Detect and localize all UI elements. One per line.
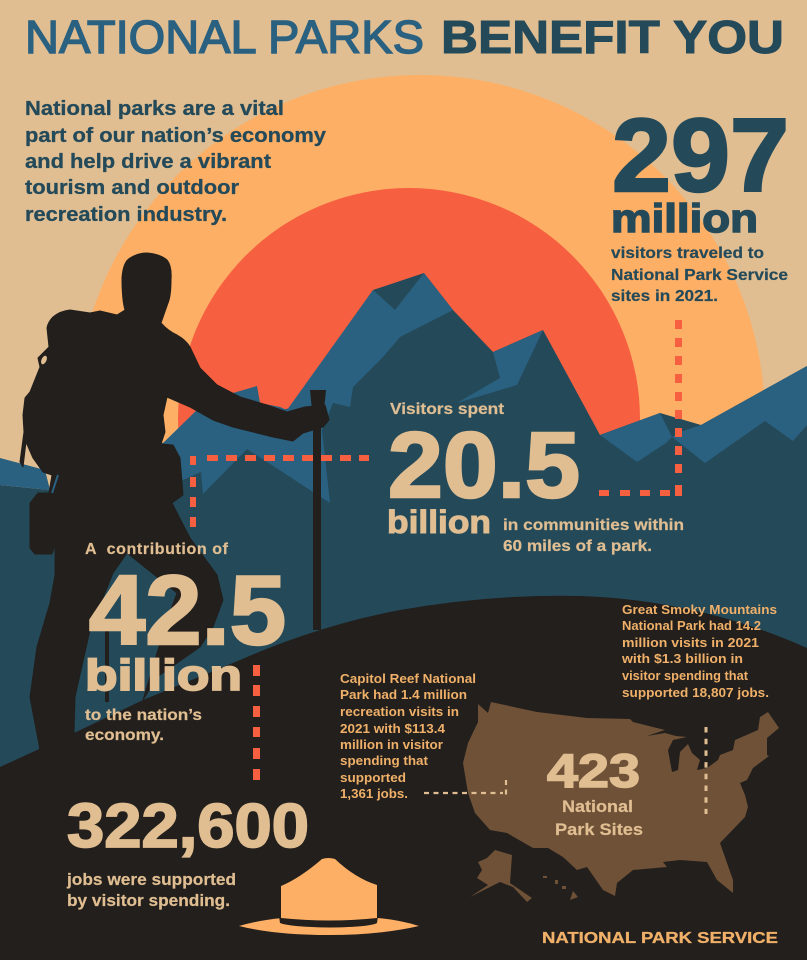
title: BENEFIT YOU	[441, 11, 784, 63]
title: NATIONAL PARKS	[25, 11, 424, 63]
bottle strap slit	[52, 475, 58, 493]
stat: 42.5 billion contribution	[85, 541, 286, 744]
callout: Capitol Reef: supported	[340, 770, 406, 785]
stat: 297 million visitors: 297	[612, 98, 789, 214]
callout: Capitol Reef: 2021 with $113.4	[340, 721, 446, 736]
callout: Great Smoky Mountains: million visits in 2021	[622, 635, 759, 650]
stat: 322,600 jobs	[66, 792, 309, 910]
intro text: and help drive a vibrant	[25, 151, 271, 173]
stat: 20.5 billion spent: Visitors spent	[390, 401, 504, 418]
callout: Great Smoky Mountains: visitor spending that	[622, 668, 749, 683]
callout: Great Smoky Mountains: with $1.3 billion in	[621, 651, 743, 666]
map of the United States	[463, 702, 779, 902]
dotted connector: 20.5 to 42.5	[190, 455, 369, 527]
footer credit: NATIONAL PARK SERVICE	[542, 930, 778, 947]
stat: 42.5 billion contribution: 42.5	[89, 555, 286, 665]
sun: inner red disc	[178, 188, 640, 650]
intro text: recreation industry.	[25, 204, 227, 226]
stat: 42.5 billion contribution: billion	[85, 651, 242, 700]
dotted connector: 297 million to 20.5	[599, 320, 682, 496]
stat: 297 million visitors: National Park Service	[611, 267, 788, 284]
intro text	[25, 98, 327, 226]
foreground hill	[0, 596, 807, 960]
intro text: part of our nation’s economy	[25, 125, 327, 147]
stat: 42.5 billion contribution: A contribution of	[85, 541, 229, 558]
map label: 423 National Park Sites: Park Sites	[555, 820, 643, 839]
stat: 20.5 billion spent	[387, 401, 684, 555]
stat: 20.5 billion spent: 60 miles of a park.	[503, 538, 652, 555]
intro text: tourism and outdoor	[25, 177, 239, 199]
stat: 20.5 billion spent: billion	[387, 504, 491, 540]
dotted connector: 42.5 to 322,600	[253, 665, 260, 780]
callout: Great Smoky Mountains: supported 18,807 jobs.	[622, 685, 769, 700]
callout: Capitol Reef: 1,361 jobs.	[340, 786, 408, 801]
title	[25, 11, 784, 63]
stat: 42.5 billion contribution: economy.	[85, 727, 164, 744]
trekking pole	[310, 390, 326, 630]
stat: 297 million visitors	[611, 98, 789, 305]
mountains: blue highlights	[0, 273, 807, 503]
stat: 297 million visitors: sites in 2021.	[611, 288, 718, 305]
stat: 297 million visitors: million	[611, 197, 758, 241]
callout: Capitol Reef: Capitol Reef National	[340, 671, 476, 686]
callout: Great Smoky Mountains: National Park had 14.2	[622, 618, 761, 633]
callout: Capitol Reef: million in visitor	[340, 737, 443, 752]
stat: 297 million visitors: visitors traveled to	[611, 245, 764, 262]
mountains: dark range	[0, 273, 807, 780]
stat: 322,600 jobs: 322,600	[67, 792, 309, 861]
map label: 423 National Park Sites	[547, 744, 643, 839]
intro text: National parks are a vital	[25, 98, 284, 120]
callout: Great Smoky Mountains	[621, 602, 777, 700]
map label: 423 National Park Sites: National	[562, 797, 633, 816]
callout: Capitol Reef: spending that	[340, 753, 429, 768]
stat: 20.5 billion spent: in communities within	[503, 517, 684, 534]
park ranger hat	[239, 858, 419, 935]
callout: Great Smoky Mountains: Great Smoky Mountains	[622, 602, 777, 617]
Alaska	[470, 850, 532, 902]
stat: 20.5 billion spent: 20.5	[388, 413, 580, 517]
map connector: Capitol Reef	[424, 780, 506, 795]
stat: 42.5 billion contribution: to the nation’s	[85, 707, 202, 724]
map connector: Great Smoky Mountains	[704, 727, 708, 814]
stat: 322,600 jobs: by visitor spending.	[67, 892, 230, 910]
Hawaii	[543, 876, 578, 900]
callout: Capitol Reef	[340, 671, 476, 801]
backpack strap gap	[40, 355, 48, 365]
map label: 423 National Park Sites: 423	[547, 744, 640, 797]
callout: Capitol Reef: Park had 1.4 million	[340, 687, 467, 702]
stat: 322,600 jobs: jobs were supported	[66, 871, 236, 889]
hiker silhouette	[20, 253, 329, 750]
sun: outer orange disc	[75, 75, 765, 765]
second pole	[105, 630, 109, 702]
callout: Capitol Reef: recreation visits in	[340, 704, 459, 719]
